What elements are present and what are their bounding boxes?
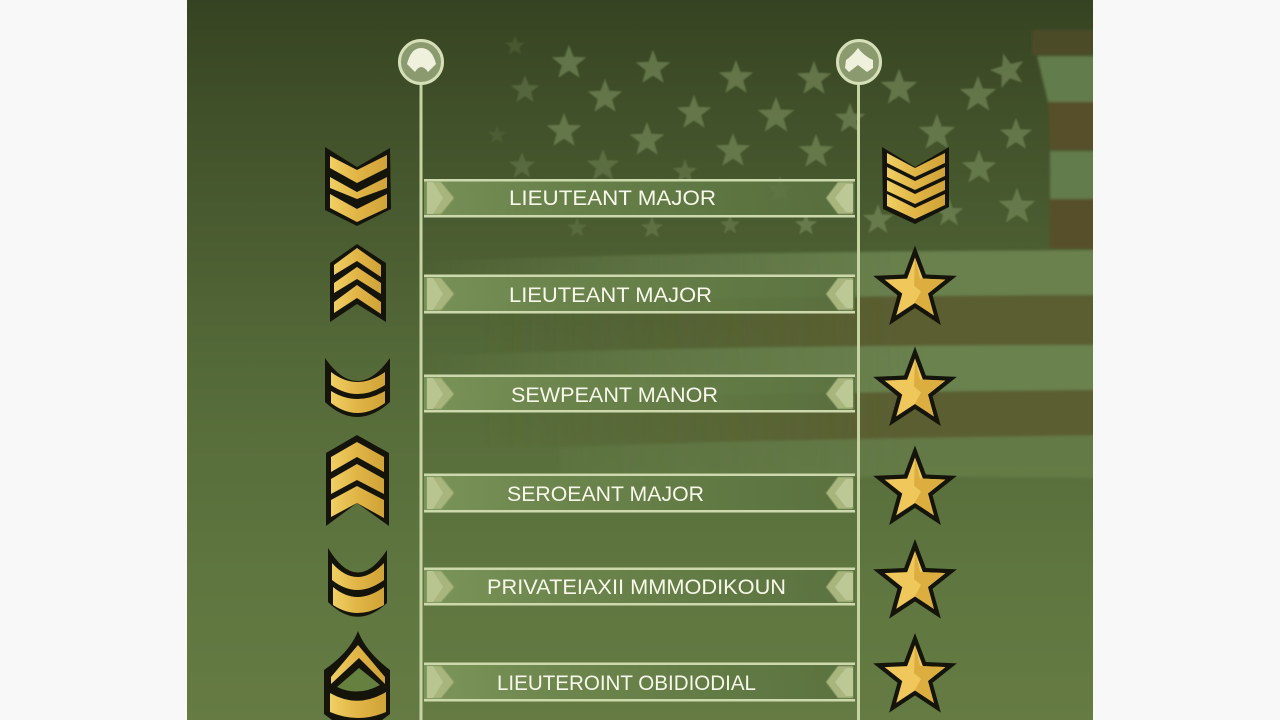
infographic canvas: [187, 0, 1093, 720]
flag long stripes: [524, 249, 1093, 477]
flag short stripes: [1032, 30, 1093, 248]
icon: chevron insignia 1: [325, 147, 391, 226]
icon: four-bar chevron right: [882, 147, 949, 224]
flag stars: [488, 36, 1034, 237]
row 3 ribbon: [424, 374, 855, 412]
row 2 label: LIEUTEANT MAJOR: [509, 283, 712, 307]
row 6 ribbon: [424, 662, 855, 702]
icon: left rail top badge: [400, 40, 442, 84]
row 5 label: PRIVATEIAXII MMMODIKOUN: [487, 575, 786, 599]
icon: chevron insignia 5: [328, 548, 387, 617]
row 3 label: SEWPEANT MANOR: [511, 383, 718, 407]
icon: chevron insignia 6: [324, 631, 390, 720]
icon: gold star 1: [873, 246, 957, 325]
icon: gold star 5: [873, 633, 957, 713]
left vertical rail: [420, 84, 422, 720]
icon: chevron insignia 4: [326, 435, 389, 526]
icon: chevron insignia 2: [330, 244, 386, 322]
row 4 label: SEROEANT MAJOR: [507, 482, 704, 506]
row 1 label: LIEUTEANT MAJOR: [509, 186, 716, 210]
background flag: [420, 30, 1102, 486]
icon: gold star 2: [873, 346, 957, 426]
row 6 label: LIEUTEROINT OBIDIODIAL: [497, 671, 756, 695]
icon: chevron insignia 3: [325, 358, 390, 417]
right vertical rail: [857, 84, 860, 720]
row 1 ribbon: [424, 179, 855, 218]
row 4 ribbon: [424, 474, 855, 512]
icon: gold star 3: [873, 446, 957, 525]
icon: right rail top badge: [838, 40, 880, 84]
row 5 ribbon: [424, 568, 855, 606]
row 2 ribbon: [424, 274, 855, 314]
green panel: [187, 0, 1093, 720]
icon: gold star 4: [873, 539, 957, 619]
